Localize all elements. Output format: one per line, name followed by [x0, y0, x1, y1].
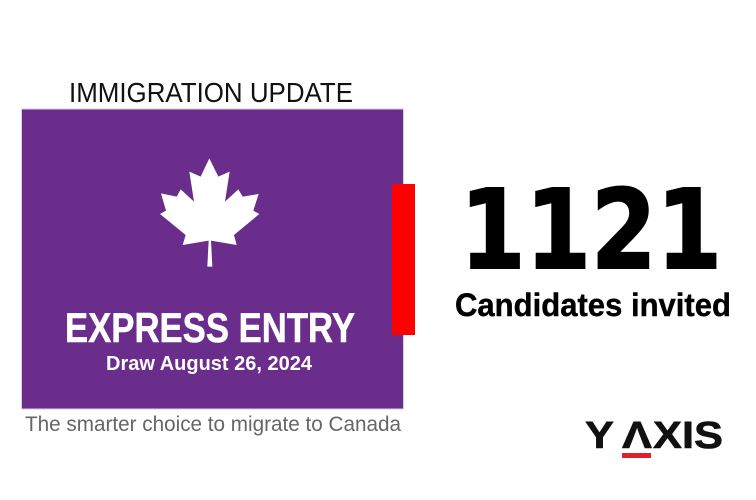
logo: y axis: Y — [585, 415, 614, 457]
draw date: Draw August 26, 2024 — [106, 353, 313, 375]
accent bar — [392, 184, 415, 335]
tagline: The smarter choice to migrate to Canada — [25, 413, 401, 436]
heading: immigration update: IMMIGRATION UPDATE — [69, 77, 353, 108]
logo: y axis — [585, 415, 723, 458]
logo: y axis: Λ — [622, 415, 653, 457]
caption: candidates invited: Candidates invited — [455, 287, 731, 323]
logo: y axis: XIS — [653, 415, 723, 457]
icon: maple leaf — [160, 158, 259, 267]
panel title: express entry: EXPRESS ENTRY — [65, 304, 355, 351]
panel: express entry — [22, 109, 404, 409]
